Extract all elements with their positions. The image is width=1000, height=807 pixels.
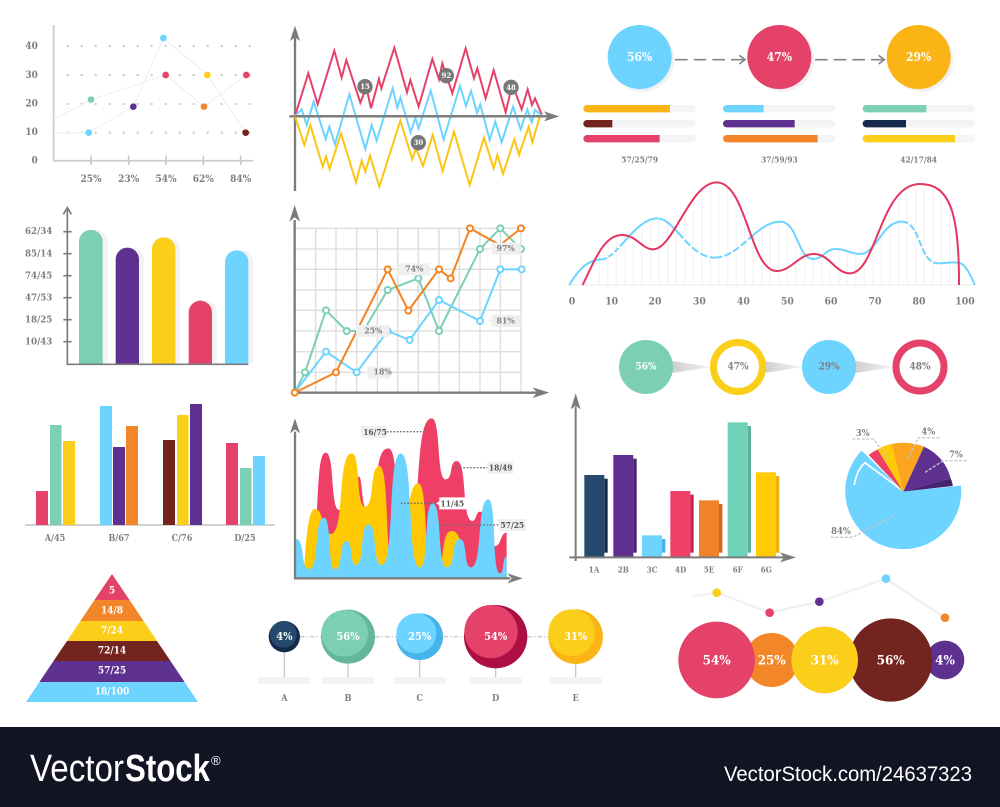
panel: pie chart: 84% bbox=[831, 526, 851, 537]
panel: pyramid chart: 5 bbox=[109, 586, 115, 596]
panel: balloon sequence A-E: C bbox=[416, 693, 423, 704]
panel: balloon sequence A-E: 4% bbox=[276, 630, 293, 643]
panel: zigzag line chart: 30 bbox=[414, 138, 423, 147]
panel: three linked circles with progress bars: 42/17/84 bbox=[900, 155, 937, 165]
panel: 3D bar chart: 2B bbox=[618, 564, 629, 574]
panel: pie chart: 3% bbox=[856, 428, 870, 439]
panel: pyramid chart: 7/24 bbox=[101, 626, 123, 636]
panel: overlapping circles with line: 31% bbox=[811, 652, 839, 668]
panel: column chart with rounded bars: 74/45 bbox=[25, 270, 52, 281]
panel: balloon sequence A-E: E bbox=[572, 693, 579, 704]
panel: scatter line chart bbox=[25, 25, 253, 185]
panel: smooth curve chart: 40 bbox=[737, 296, 750, 308]
panel: smooth curve chart: 70 bbox=[869, 296, 882, 308]
panel: smooth curve chart: 50 bbox=[781, 296, 794, 308]
panel: scatter line chart: 62% bbox=[193, 174, 214, 185]
panel: grouped bar chart bbox=[25, 404, 275, 544]
panel: ring percentage sequence: 29% bbox=[818, 362, 840, 372]
panel: balloon sequence A-E: 56% bbox=[336, 630, 360, 643]
panel: 3D bar chart: 5E bbox=[704, 564, 715, 574]
panel: pyramid chart: 57/25 bbox=[98, 666, 126, 676]
panel: grid line chart: 97% bbox=[497, 244, 515, 254]
panel: scatter line chart: 20 bbox=[25, 98, 38, 109]
panel: pyramid chart bbox=[26, 574, 198, 702]
panel: grid line chart: 25% bbox=[364, 326, 383, 336]
panel: smooth curve chart: 10 bbox=[605, 296, 619, 308]
panel: column chart with rounded bars bbox=[25, 208, 253, 364]
panel: column chart with rounded bars: 47/53 bbox=[25, 292, 52, 303]
panel: scatter line chart: 30 bbox=[25, 70, 38, 81]
panel: smooth curve chart bbox=[568, 182, 975, 308]
panel: overlapping circles with line bbox=[678, 574, 964, 702]
panel: balloon sequence A-E: B bbox=[344, 693, 352, 704]
panel: smooth curve chart: 20 bbox=[649, 296, 662, 308]
panel: 3D bar chart: 3C bbox=[647, 564, 658, 574]
panel: grid line chart: 81% bbox=[497, 316, 515, 326]
panel: 3D bar chart: 4D bbox=[675, 564, 686, 574]
panel: scatter line chart: 84% bbox=[230, 174, 252, 185]
panel: 3D bar chart: 6F bbox=[733, 564, 743, 574]
panel: pie chart: 4% bbox=[921, 426, 935, 437]
panel: scatter line chart: 25% bbox=[80, 174, 102, 185]
panel: overlapping circles with line: 56% bbox=[877, 652, 905, 668]
panel: balloon sequence A-E: 54% bbox=[484, 630, 508, 643]
panel: pie chart: 7% bbox=[949, 449, 963, 460]
footer band: VectorStock.com/24637323 bbox=[724, 763, 972, 786]
panel: balloon sequence A-E: D bbox=[492, 693, 499, 704]
panel: three linked circles with progress bars: 47% bbox=[767, 50, 792, 64]
footer band: ® bbox=[211, 753, 221, 768]
panel: grouped bar chart: A/45 bbox=[44, 534, 66, 544]
panel: zigzag line chart: 92 bbox=[442, 71, 451, 80]
panel: smooth curve chart: 100 bbox=[955, 296, 975, 308]
panel: scatter line chart: 40 bbox=[25, 41, 38, 52]
panel: zigzag line chart bbox=[289, 26, 559, 191]
panel: grouped bar chart: C/76 bbox=[172, 534, 193, 544]
panel: ring percentage sequence bbox=[619, 340, 944, 394]
red area bbox=[317, 418, 507, 578]
panel: smooth curve chart: 80 bbox=[913, 296, 926, 308]
panel: smooth curve chart: 30 bbox=[693, 296, 706, 308]
panel: area chart: 57/25 bbox=[501, 520, 524, 530]
panel: ring percentage sequence: 47% bbox=[727, 362, 749, 372]
panel: pyramid chart: 18/100 bbox=[95, 686, 129, 698]
panel: balloon sequence A-E bbox=[258, 605, 603, 704]
footer band: Stock bbox=[125, 748, 211, 790]
panel: smooth curve chart: 0 bbox=[569, 296, 576, 308]
panel: area chart: 16/75 bbox=[363, 427, 387, 437]
panel: area chart bbox=[290, 418, 526, 583]
panel: balloon sequence A-E: 25% bbox=[408, 630, 432, 643]
panel: scatter line chart: 23% bbox=[118, 174, 140, 185]
panel: pyramid chart: 14/8 bbox=[101, 606, 123, 616]
panel: scatter line chart: 54% bbox=[155, 174, 177, 185]
footer band bbox=[0, 727, 1000, 807]
panel: ring percentage sequence: 48% bbox=[909, 362, 931, 372]
panel: zigzag line chart: 15 bbox=[360, 82, 370, 91]
panel: three linked circles with progress bars bbox=[583, 25, 975, 165]
panel: three linked circles with progress bars: 29% bbox=[906, 50, 931, 64]
panel: pie chart bbox=[831, 426, 967, 549]
panel: ring percentage sequence: 56% bbox=[635, 362, 657, 372]
panel: zigzag line chart: 48 bbox=[506, 83, 516, 92]
footer band: Vector bbox=[30, 748, 124, 790]
panel: balloon sequence A-E: A bbox=[280, 693, 288, 704]
panel: column chart with rounded bars: 18/25 bbox=[25, 314, 52, 325]
panel: pyramid chart: 72/14 bbox=[98, 646, 126, 656]
panel: grid line chart bbox=[289, 205, 549, 398]
panel: three linked circles with progress bars: 37/59/93 bbox=[761, 155, 798, 165]
panel: three linked circles with progress bars: 56% bbox=[627, 50, 652, 64]
panel: area chart: 18/49 bbox=[489, 463, 512, 473]
panel: three linked circles with progress bars: 57/25/79 bbox=[621, 155, 658, 165]
panel: grouped bar chart: B/67 bbox=[108, 534, 130, 544]
panel: overlapping circles with line: 54% bbox=[703, 652, 731, 668]
panel: column chart with rounded bars: 85/14 bbox=[25, 248, 52, 259]
panel: overlapping circles with line: 25% bbox=[758, 652, 786, 668]
blue area bbox=[296, 453, 507, 578]
panel: smooth curve chart: 60 bbox=[825, 296, 838, 308]
panel: grid line chart: 74% bbox=[405, 264, 424, 274]
panel: 3D bar chart bbox=[569, 393, 796, 574]
panel: 3D bar chart: 1A bbox=[589, 564, 600, 574]
panel: column chart with rounded bars: 10/43 bbox=[25, 336, 52, 347]
yellow area bbox=[304, 453, 493, 578]
panel: 3D bar chart: 6G bbox=[761, 564, 772, 574]
panel: grouped bar chart: D/25 bbox=[234, 534, 256, 544]
panel: balloon sequence A-E: 31% bbox=[564, 630, 588, 643]
panel: scatter line chart: 10 bbox=[25, 127, 38, 138]
panel: overlapping circles with line: 4% bbox=[935, 652, 955, 668]
panel: column chart with rounded bars: 62/34 bbox=[25, 226, 52, 237]
panel: area chart: 11/45 bbox=[441, 498, 464, 508]
panel: grid line chart: 18% bbox=[374, 368, 392, 378]
panel: scatter line chart: 0 bbox=[32, 155, 38, 166]
